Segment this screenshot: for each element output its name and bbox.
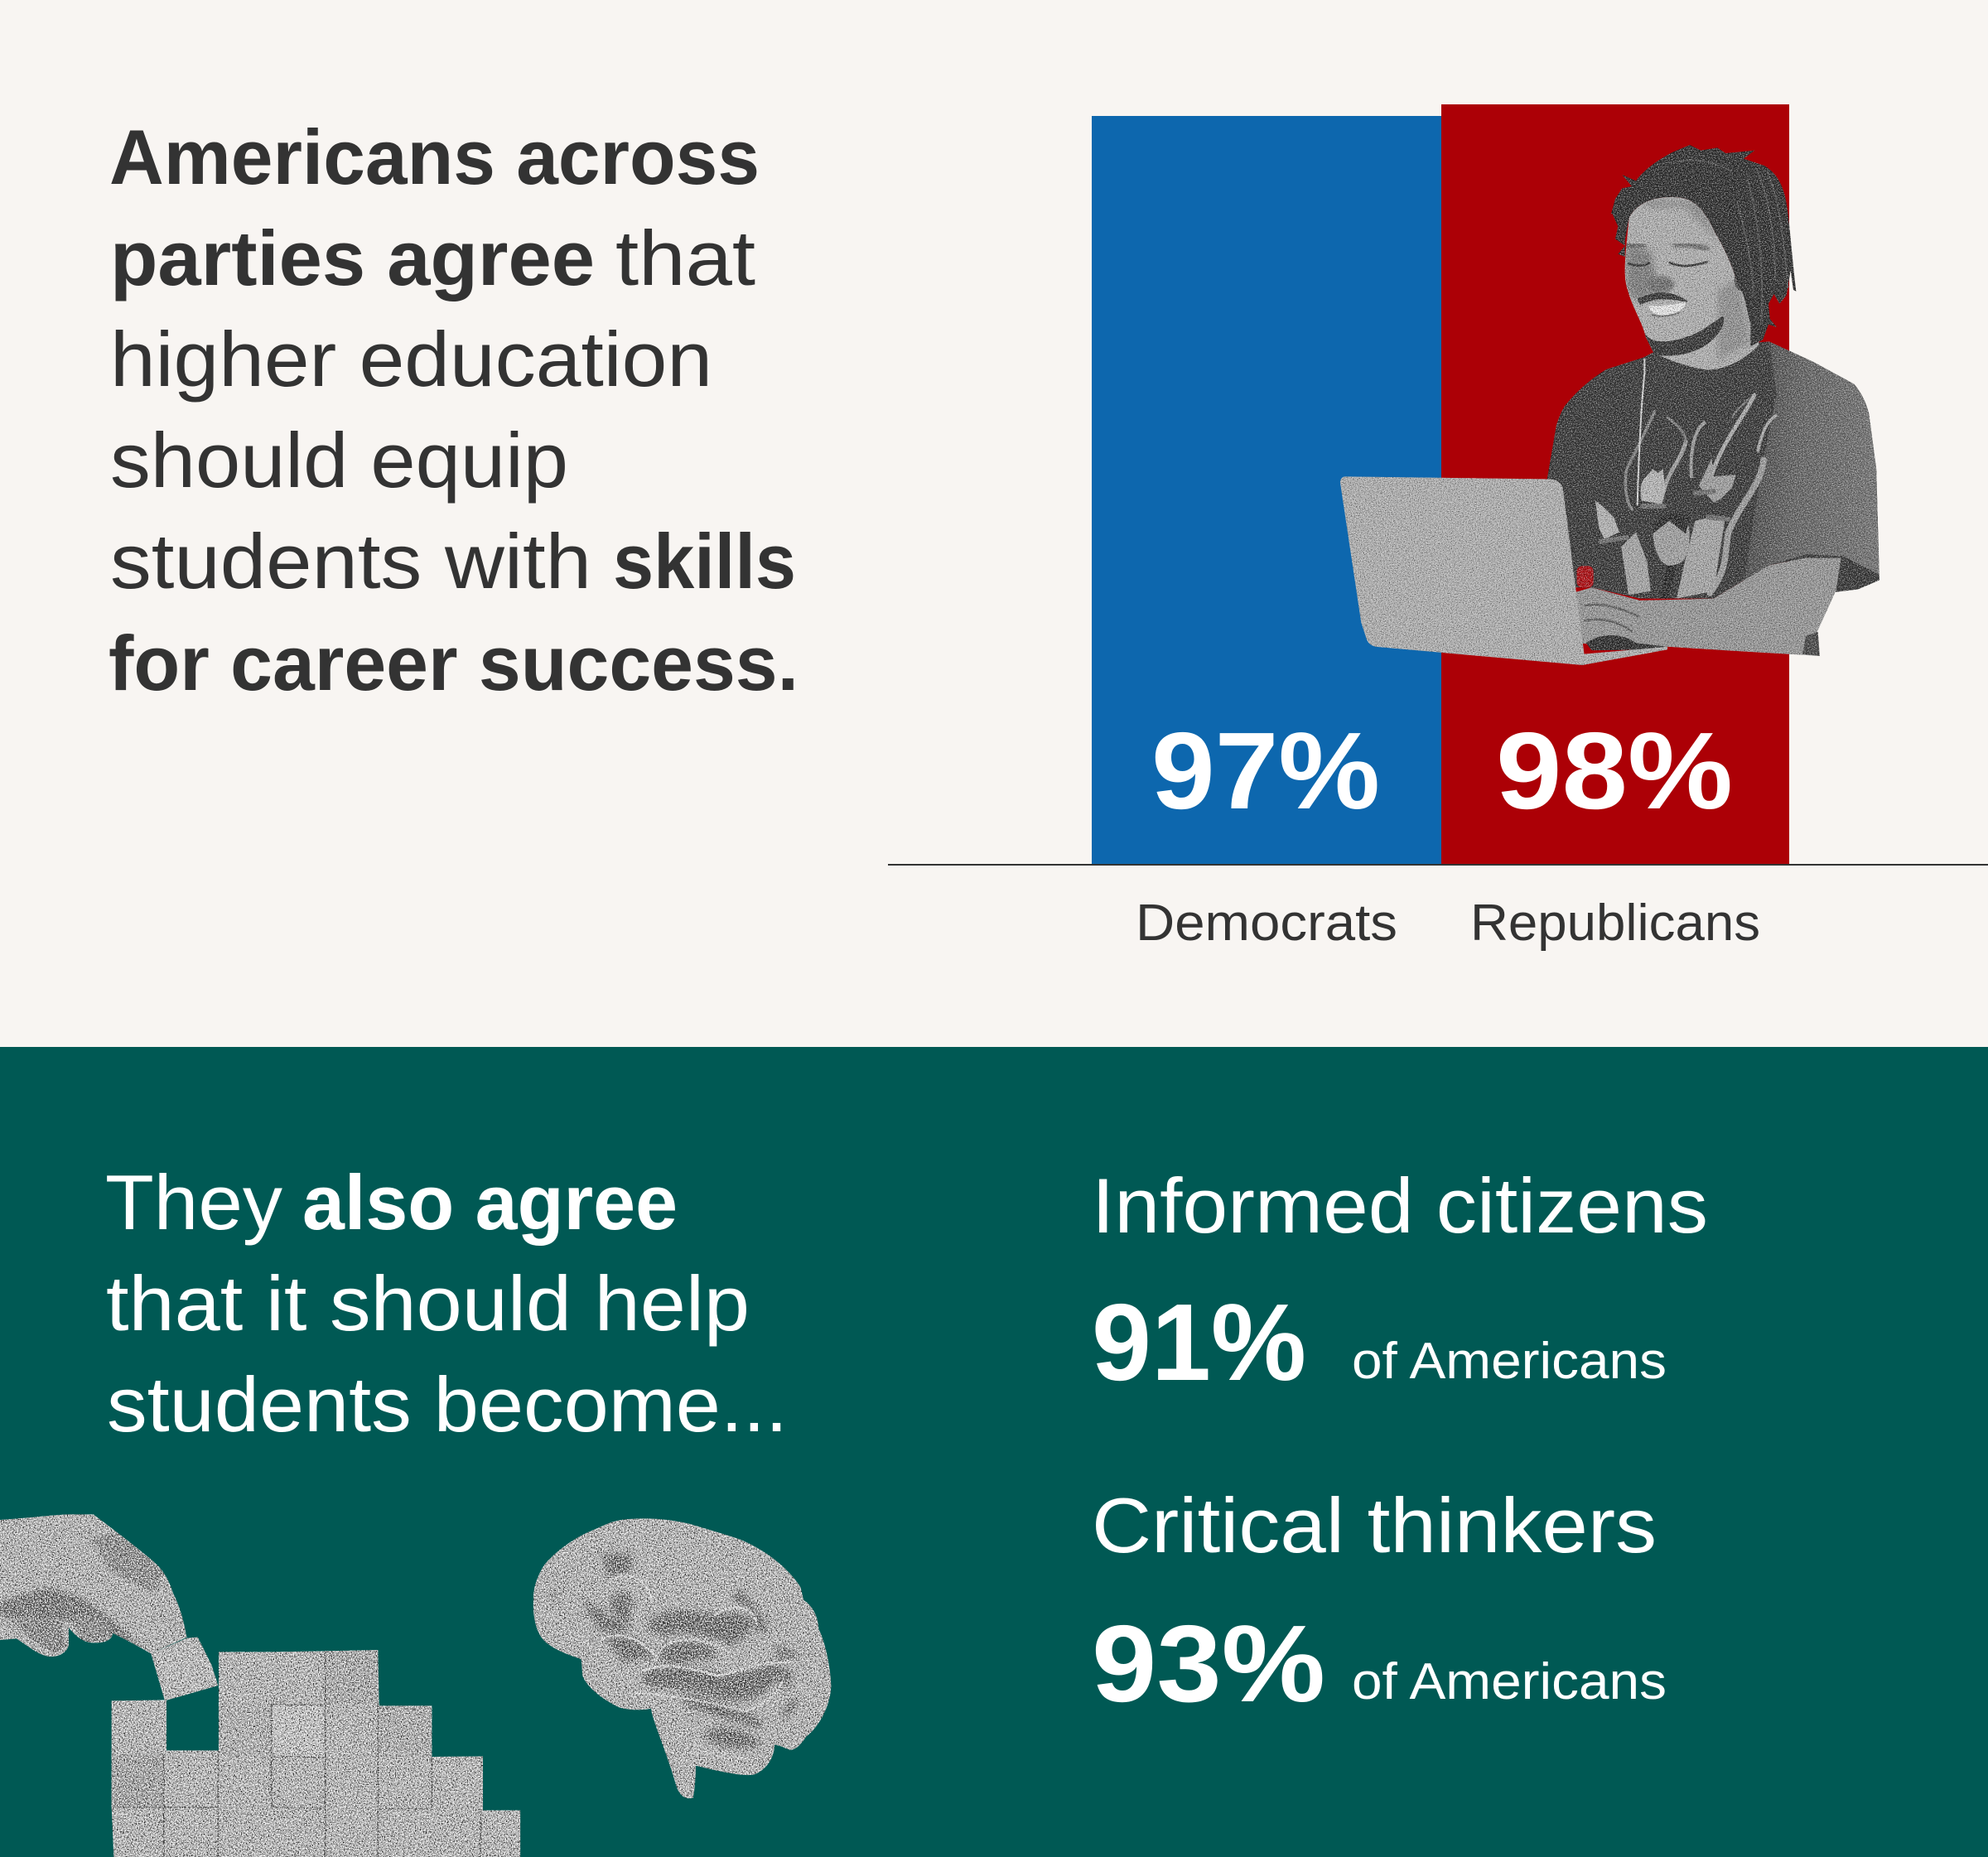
stacked blocks <box>112 1650 520 1857</box>
panel: bottom section background <box>0 1047 1988 1857</box>
bar chart: party agreement <box>888 104 1988 952</box>
heading: Americans across parties agree: that <box>615 215 755 301</box>
heading: They also agree: also agree <box>302 1159 678 1246</box>
value: 97%: 97% <box>1151 710 1380 832</box>
earphone cord <box>1638 359 1644 505</box>
heading: They also agree <box>105 1159 788 1448</box>
bar: Democrats <box>1092 116 1441 864</box>
shirt sleeve <box>1743 341 1879 587</box>
shirt <box>1547 341 1879 599</box>
heading: Americans across parties agree: for career success. <box>109 620 799 707</box>
beard <box>1644 316 1724 356</box>
heading: They also agree: that it should help <box>106 1260 750 1347</box>
image: student smiling at laptop <box>1340 145 1879 665</box>
axis line <box>888 864 1988 866</box>
value: 98%: 98% <box>1496 710 1733 832</box>
label: Informed citizens: Informed citizens <box>1092 1162 1708 1249</box>
light ridges <box>602 1576 789 1763</box>
value: 93%: 93% <box>1092 1603 1325 1724</box>
heading: Americans across parties agree: Americans across <box>109 113 760 200</box>
head and neck <box>1625 197 1759 370</box>
heading: Americans across parties agree: skills <box>613 518 796 605</box>
heading: Americans across parties agree <box>109 113 799 707</box>
hand <box>0 1514 187 1657</box>
hole between arm and shirt <box>1577 566 1594 587</box>
hair <box>1611 145 1796 346</box>
caption: of Americans: of Americans <box>1352 1653 1667 1710</box>
image: brain <box>533 1518 831 1798</box>
value: 91%: 91% <box>1092 1281 1306 1403</box>
panel: top section background <box>0 0 1988 1047</box>
shaded folds <box>548 1555 803 1748</box>
stat: Critical thinkers <box>1092 1482 1667 1724</box>
heading: Americans across parties agree: should equip <box>110 417 568 504</box>
mustache <box>1638 292 1687 305</box>
ear <box>1735 276 1741 291</box>
heading: Americans across parties agree: parties agree <box>110 215 595 301</box>
dreadlock strands <box>1673 160 1788 323</box>
heading: Americans across parties agree: higher education <box>110 316 712 403</box>
held block <box>151 1638 218 1700</box>
caption: of Americans: of Americans <box>1352 1333 1667 1390</box>
face shading <box>1626 246 1673 301</box>
heading: Americans across parties agree: students with <box>110 518 591 605</box>
teeth <box>1648 302 1686 316</box>
eyes <box>1628 262 1708 266</box>
label: Democrats: Democrats <box>1136 895 1397 952</box>
image: hand stacking blocks <box>0 1514 520 1857</box>
shirt graphic <box>1625 395 1776 593</box>
heading: They also agree: students become... <box>107 1361 788 1448</box>
label: Republicans: Republicans <box>1470 895 1760 952</box>
bar: Republicans <box>1441 104 1789 864</box>
stat: Informed citizens <box>1092 1162 1708 1403</box>
label: Critical thinkers: Critical thinkers <box>1092 1482 1657 1569</box>
laptop <box>1340 476 1667 665</box>
heading: They also agree: They <box>105 1159 282 1246</box>
arm and hand <box>1566 558 1841 656</box>
